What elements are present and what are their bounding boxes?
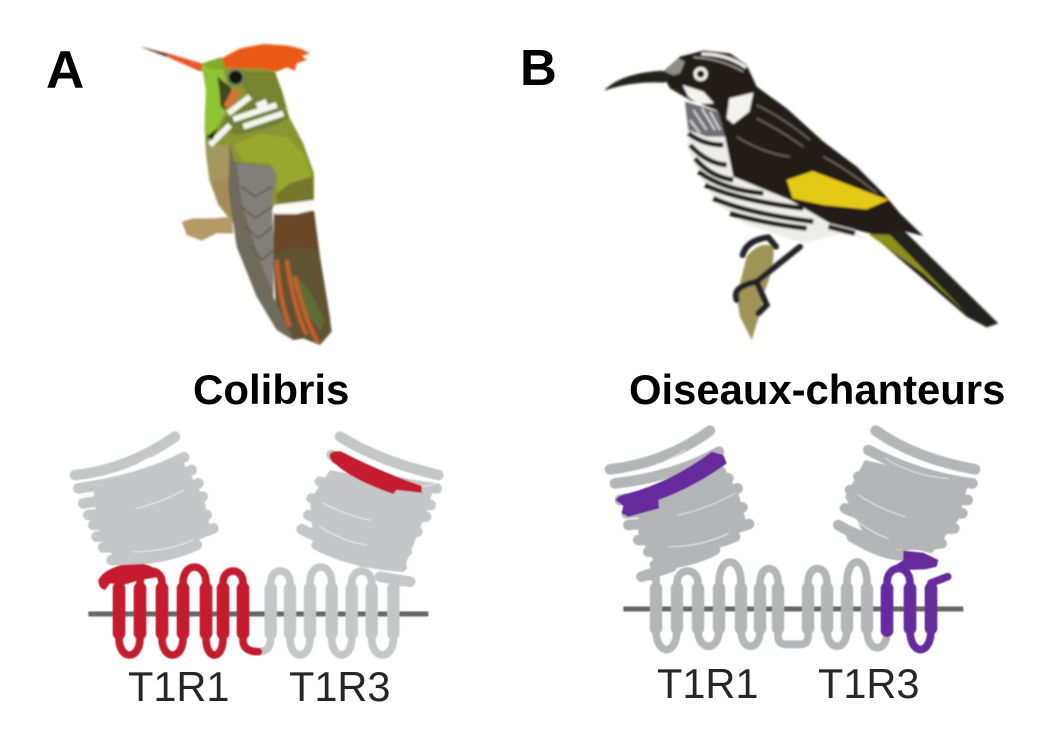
breast tan	[207, 145, 230, 217]
collar	[206, 97, 289, 145]
cheek orange	[223, 90, 241, 107]
T1R3 transmembrane chain	[258, 567, 412, 655]
purple transmembrane chain	[887, 568, 948, 649]
legs and feet	[736, 237, 800, 313]
illustration: honeyeater songbird	[604, 51, 998, 340]
crown green	[202, 57, 224, 69]
belly stripes	[688, 133, 855, 233]
nape olive	[242, 72, 287, 108]
label: T1R3: T1R3	[289, 663, 390, 710]
membrane	[88, 606, 428, 621]
back shadow	[277, 177, 314, 203]
receptor diagram: songbird	[610, 431, 975, 649]
face dark patch	[217, 77, 233, 110]
bill	[140, 47, 213, 73]
eye	[227, 69, 244, 86]
wing	[228, 143, 294, 341]
white cheek patches	[683, 85, 753, 124]
eye	[694, 67, 708, 81]
membrane	[623, 601, 963, 616]
bill	[604, 71, 673, 91]
tail	[868, 227, 998, 327]
back streaks	[737, 105, 877, 193]
throat	[685, 102, 725, 137]
heading: Colibris: Colibris	[193, 366, 349, 413]
back bright green	[233, 133, 313, 200]
illustration: hummingbird	[140, 44, 332, 345]
T1R3 extracellular lobe	[838, 431, 975, 555]
T1R3 extracellular lobe	[302, 437, 438, 582]
label: T1R3: T1R3	[818, 660, 919, 707]
body silhouette	[202, 57, 314, 237]
T1R1 extracellular lobe	[610, 431, 749, 577]
white rump band	[274, 200, 314, 214]
T1R3 red binding segment	[329, 451, 422, 494]
belly white	[687, 127, 867, 243]
throat green	[202, 65, 228, 138]
yellow wing patch	[787, 171, 888, 209]
panel letter A: A	[46, 41, 84, 100]
receptor diagram: hummingbird	[75, 437, 438, 655]
label: T1R1: T1R1	[657, 660, 758, 707]
label: T1R1: T1R1	[128, 663, 229, 710]
purple cap	[893, 551, 938, 570]
crest	[222, 44, 310, 72]
T1R1 extracellular lobe	[75, 437, 213, 562]
T1R1 transmembrane chain (red)	[119, 567, 258, 655]
perch	[737, 245, 774, 340]
lower back and tail	[273, 211, 332, 345]
grey forehead and supercilium	[665, 58, 685, 76]
head and back	[662, 51, 923, 236]
grey transmembrane chain	[640, 562, 887, 649]
heading: Oiseaux-chanteurs: Oiseaux-chanteurs	[629, 366, 1005, 413]
purple binding segment	[616, 452, 727, 517]
branch	[182, 217, 233, 241]
T1R1 red cap	[98, 564, 160, 590]
panel letter B: B	[520, 39, 557, 96]
